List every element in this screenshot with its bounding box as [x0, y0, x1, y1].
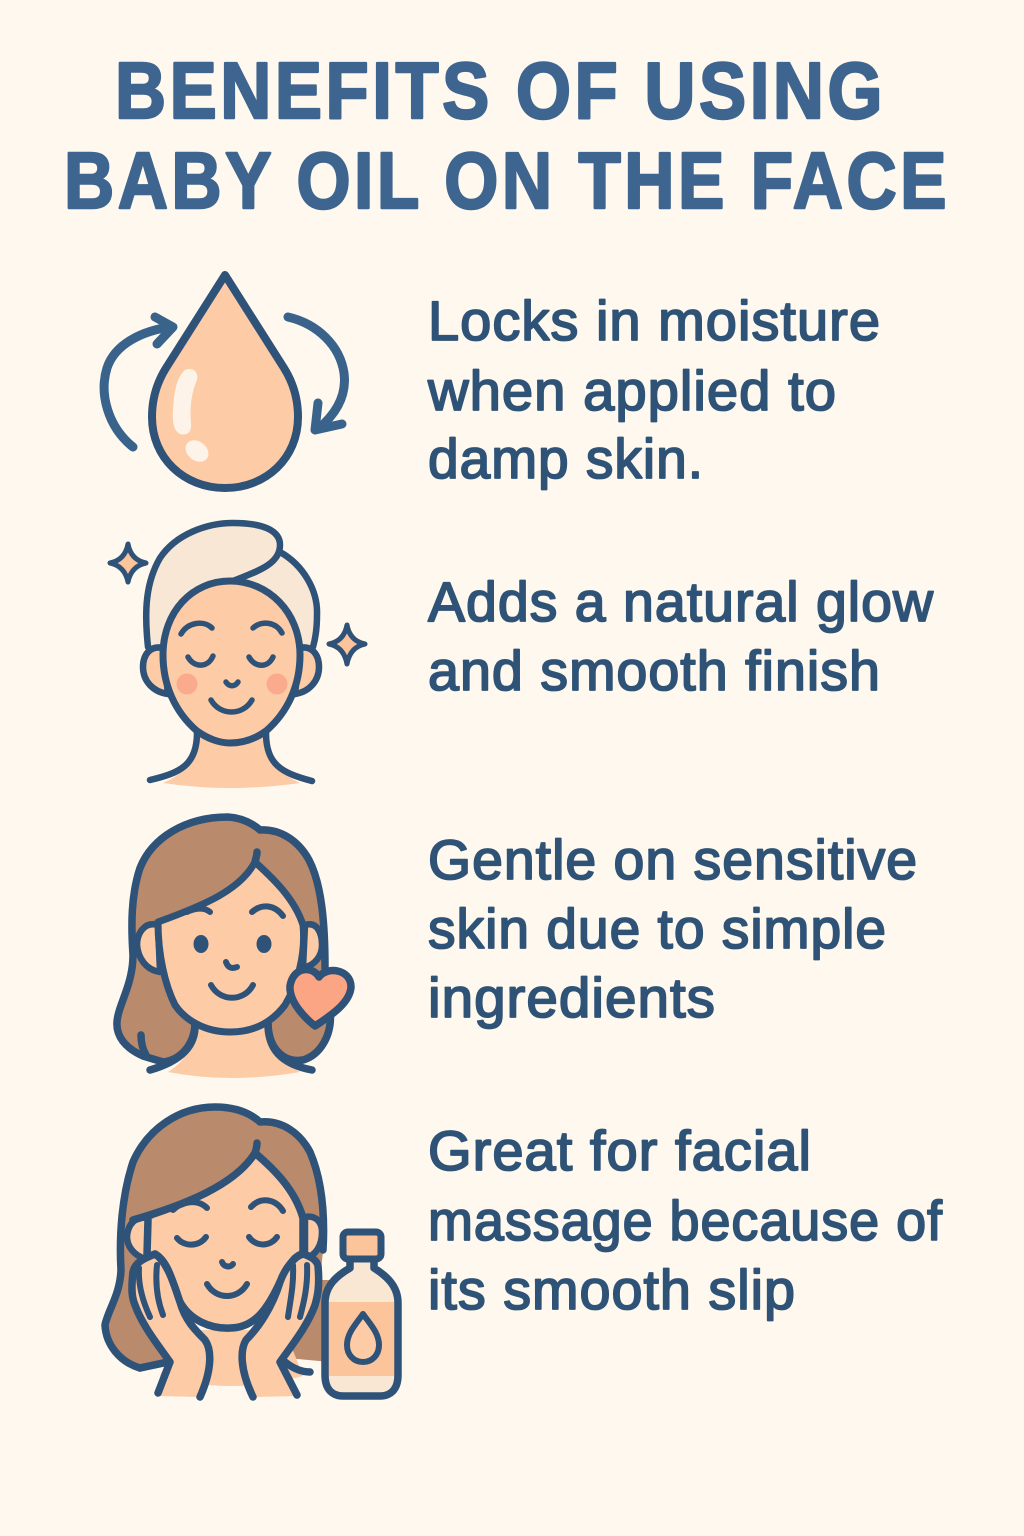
title: BENEFITS OF USING: [115, 46, 886, 135]
text block: natural glow: [428, 570, 934, 702]
text block: gentle on sensitive skin: Gentle on sensitive: [428, 828, 918, 891]
text block: natural glow: and smooth finish: [428, 639, 881, 702]
text block: gentle on sensitive skin: skin due to simple: [428, 897, 887, 960]
text block: facial massage: massage because of: [428, 1189, 943, 1252]
text block: facial massage: [428, 1119, 943, 1321]
text block: facial massage: Great for facial: [428, 1119, 812, 1182]
panel: facial massage: [105, 1107, 943, 1397]
text block: gentle on sensitive skin: [428, 828, 918, 1029]
text block: locks in moisture: damp skin.: [428, 427, 704, 490]
icon: glowing face with towel: [110, 523, 365, 788]
text block: facial massage: its smooth slip: [428, 1258, 796, 1321]
text block: natural glow: Adds a natural glow: [428, 570, 934, 633]
panel: natural glow: [110, 523, 934, 788]
icon: face massage with oil bottle: [105, 1107, 398, 1397]
text block: locks in moisture: [427, 289, 881, 490]
icon: oil drop with circular arrows: [104, 275, 344, 488]
title: [64, 46, 950, 225]
text block: locks in moisture: Locks in moisture: [428, 289, 881, 352]
text block: gentle on sensitive skin: ingredients: [428, 966, 716, 1029]
text block: locks in moisture: when applied to: [427, 359, 837, 422]
icon: smiling face with heart: [117, 817, 351, 1078]
panel: locks in moisture: [104, 275, 881, 490]
panel: gentle on sensitive skin: [117, 817, 918, 1078]
